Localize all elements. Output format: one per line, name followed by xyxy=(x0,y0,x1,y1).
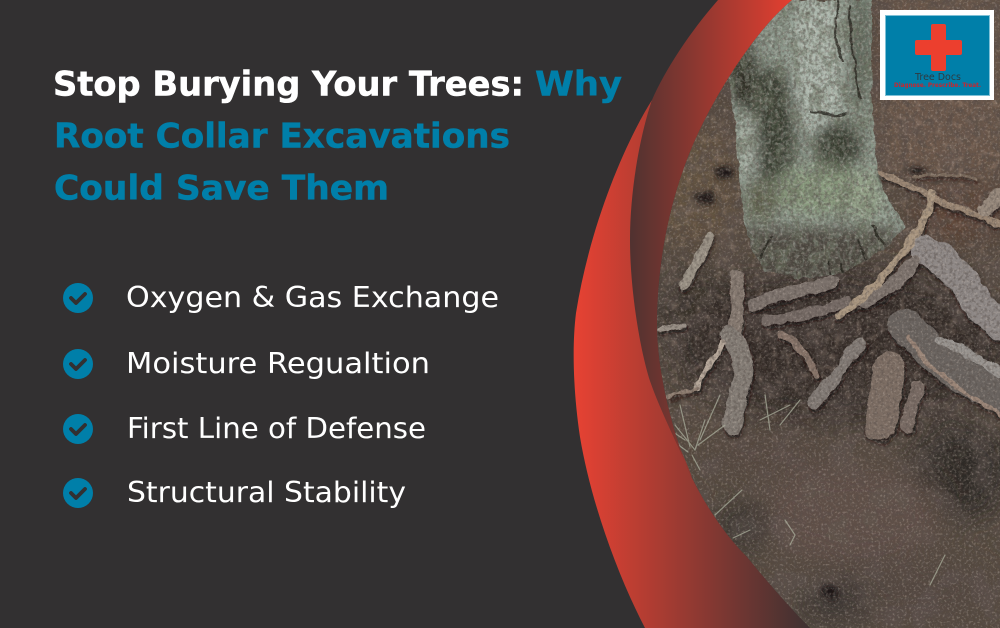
title: Root Collar Excavations xyxy=(54,116,510,156)
trunk xyxy=(728,0,906,280)
title xyxy=(53,64,622,208)
item: structural stability: Structural Stability xyxy=(127,476,406,509)
photo: tree trunk and exposed roots xyxy=(640,0,1000,628)
logo: Tree Docs: Diagnose. Prescribe. Treat. xyxy=(894,82,981,89)
item: first line of defense: First Line of Defense xyxy=(127,412,426,445)
title: Could Save Them xyxy=(54,168,389,208)
dark hollows xyxy=(696,165,927,599)
fine grain over the whole photo xyxy=(650,0,1000,628)
item: moisture regulation: Moisture Regualtion xyxy=(126,347,430,380)
item: oxygen and gas exchange: Oxygen & Gas Exchange xyxy=(126,281,499,314)
logo: Tree Docs: Tree Docs xyxy=(914,72,961,83)
title: Stop Burying Your Trees: xyxy=(53,64,524,104)
checklist xyxy=(63,281,499,509)
roots xyxy=(660,174,1000,425)
logo: Tree Docs xyxy=(880,10,994,100)
upper gradient curved band xyxy=(630,0,792,477)
title: Why xyxy=(535,64,622,104)
outer red curved band xyxy=(574,100,810,628)
grass blades xyxy=(670,395,945,585)
